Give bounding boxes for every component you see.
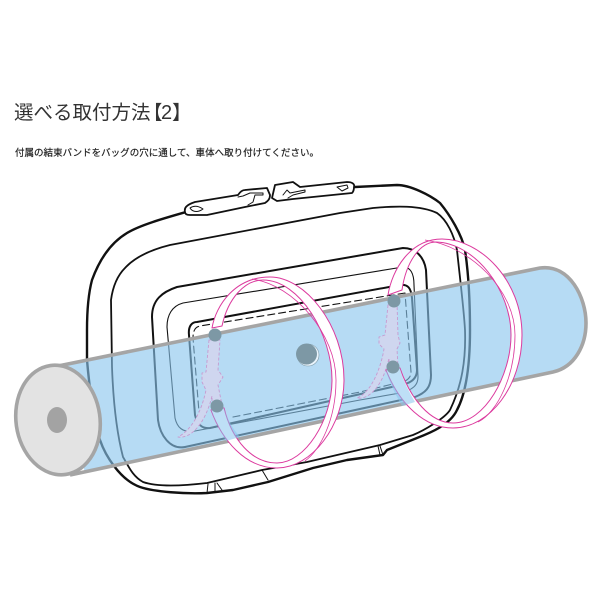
panel stitching xyxy=(193,293,411,417)
title: 】 xyxy=(172,102,192,124)
pipe end hole xyxy=(47,407,67,433)
thin inner line xyxy=(167,267,418,431)
top zipper pull tabs xyxy=(185,182,354,215)
bag outer outline xyxy=(87,185,470,493)
pipe edge xyxy=(58,268,586,475)
title: 2 xyxy=(161,102,172,124)
bag second outline xyxy=(111,207,465,486)
bag illustration xyxy=(87,182,470,493)
left fastening strap xyxy=(178,340,223,437)
left binding band xyxy=(211,277,344,468)
transparent pipe body xyxy=(58,268,587,473)
title: 選べる取付方法 xyxy=(14,102,151,124)
recessed panel xyxy=(189,285,417,428)
inner frame xyxy=(152,248,431,447)
strap holes xyxy=(208,294,400,412)
band tint inside pipe xyxy=(211,408,240,441)
pipe end cap xyxy=(9,360,107,480)
title: 【 xyxy=(143,102,163,124)
bottom strap tabs xyxy=(207,446,383,493)
center mounting hole xyxy=(296,344,319,366)
right binding band xyxy=(386,239,522,428)
band tint inside pipe xyxy=(386,368,415,406)
right fastening strap xyxy=(357,303,400,398)
instruction text: 付属の結束バンドをバッグの穴に通して、車体へ取り付けてください。 xyxy=(15,147,319,159)
